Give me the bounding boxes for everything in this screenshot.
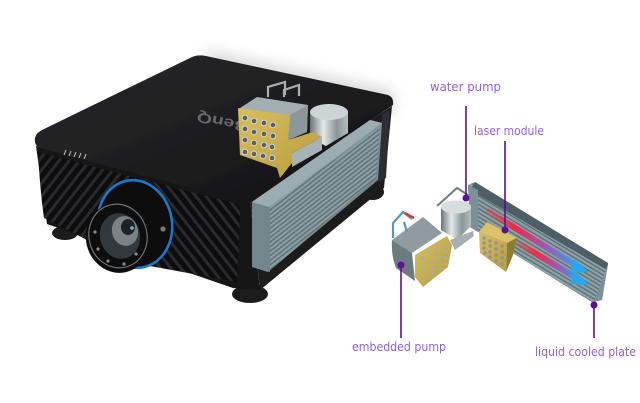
module can bbox=[310, 112, 348, 146]
internal laser module bbox=[238, 82, 348, 178]
embedded pump component bbox=[392, 212, 452, 287]
cooling system diagram bbox=[392, 182, 608, 302]
brand logo: BenQ bbox=[195, 109, 250, 135]
red-to-blue flow arrows bbox=[486, 210, 590, 285]
rear side vents bbox=[378, 110, 390, 182]
projector illustration bbox=[35, 50, 396, 303]
water pump component bbox=[437, 188, 474, 250]
front ribbed grille bbox=[38, 150, 240, 282]
projector top surface bbox=[35, 55, 393, 202]
gold block screw grid bbox=[242, 115, 276, 161]
label: water pump: water pump bbox=[430, 80, 501, 94]
status vents bbox=[64, 150, 86, 159]
lens assembly bbox=[78, 174, 179, 280]
projector feet bbox=[52, 184, 384, 303]
laser module component bbox=[479, 222, 517, 272]
label: laser module: laser module bbox=[474, 124, 544, 138]
gold block bbox=[238, 108, 322, 178]
liquid cooled plate on projector bbox=[252, 120, 382, 272]
callout lines and dots bbox=[398, 106, 598, 338]
label: embedded pump: embedded pump bbox=[352, 340, 446, 354]
cooled plate component bbox=[468, 182, 608, 302]
projector body bbox=[36, 146, 260, 290]
pump handles bbox=[268, 82, 299, 97]
